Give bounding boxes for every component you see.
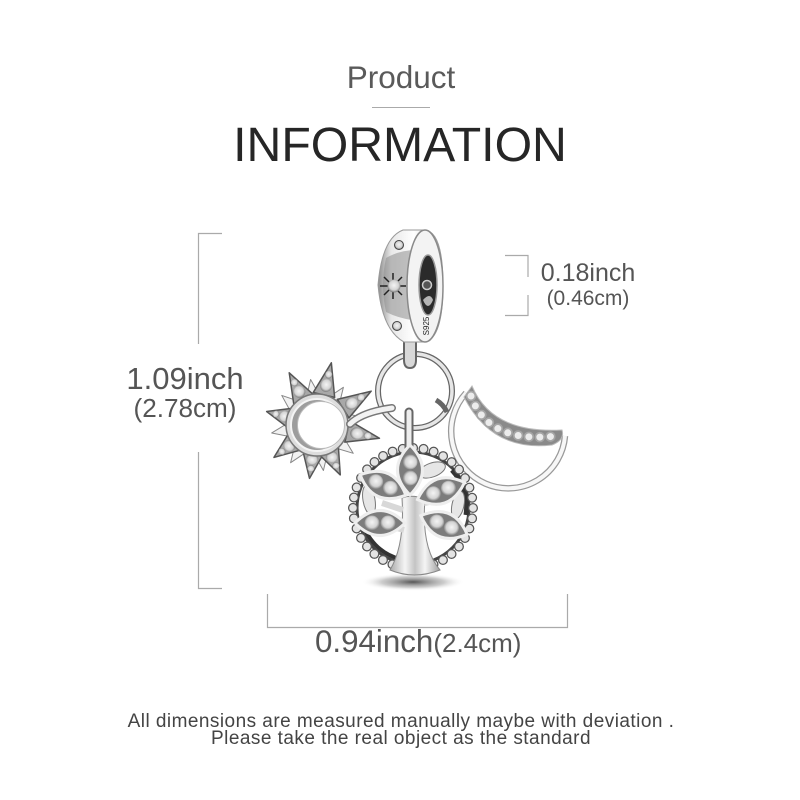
large jump ring — [378, 354, 452, 428]
sun charm — [264, 360, 392, 480]
width bracket — [268, 594, 568, 628]
trunk — [390, 496, 440, 575]
bail bead — [378, 230, 443, 342]
heading: INFORMATION: INFORMATION — [233, 118, 567, 172]
shadow — [361, 573, 465, 591]
height bracket — [198, 234, 222, 588]
small link — [404, 412, 414, 448]
moon charm — [436, 386, 565, 488]
side petals — [416, 459, 448, 481]
height label: 1.09inch — [126, 361, 244, 396]
bail link — [404, 340, 416, 368]
thickness label — [541, 259, 635, 310]
thickness label: (0.46cm) — [547, 287, 629, 310]
tree of life medallion — [353, 412, 473, 575]
height label: (2.78cm) — [134, 395, 236, 423]
leaves — [398, 445, 422, 495]
footer note — [128, 711, 674, 749]
charm illustration — [264, 230, 565, 591]
thickness bracket — [505, 256, 528, 316]
footer note: All dimensions are measured manually maybe with deviation . — [128, 711, 674, 732]
hallmark: S925 — [422, 316, 431, 335]
width label: 0.94inch(2.4cm) — [315, 624, 521, 659]
thickness label: 0.18inch — [541, 259, 635, 287]
star gems on bail — [380, 273, 406, 299]
heading: Product: Product — [347, 59, 456, 95]
height label — [126, 361, 244, 423]
footer note: Please take the real object as the standard — [211, 728, 591, 749]
